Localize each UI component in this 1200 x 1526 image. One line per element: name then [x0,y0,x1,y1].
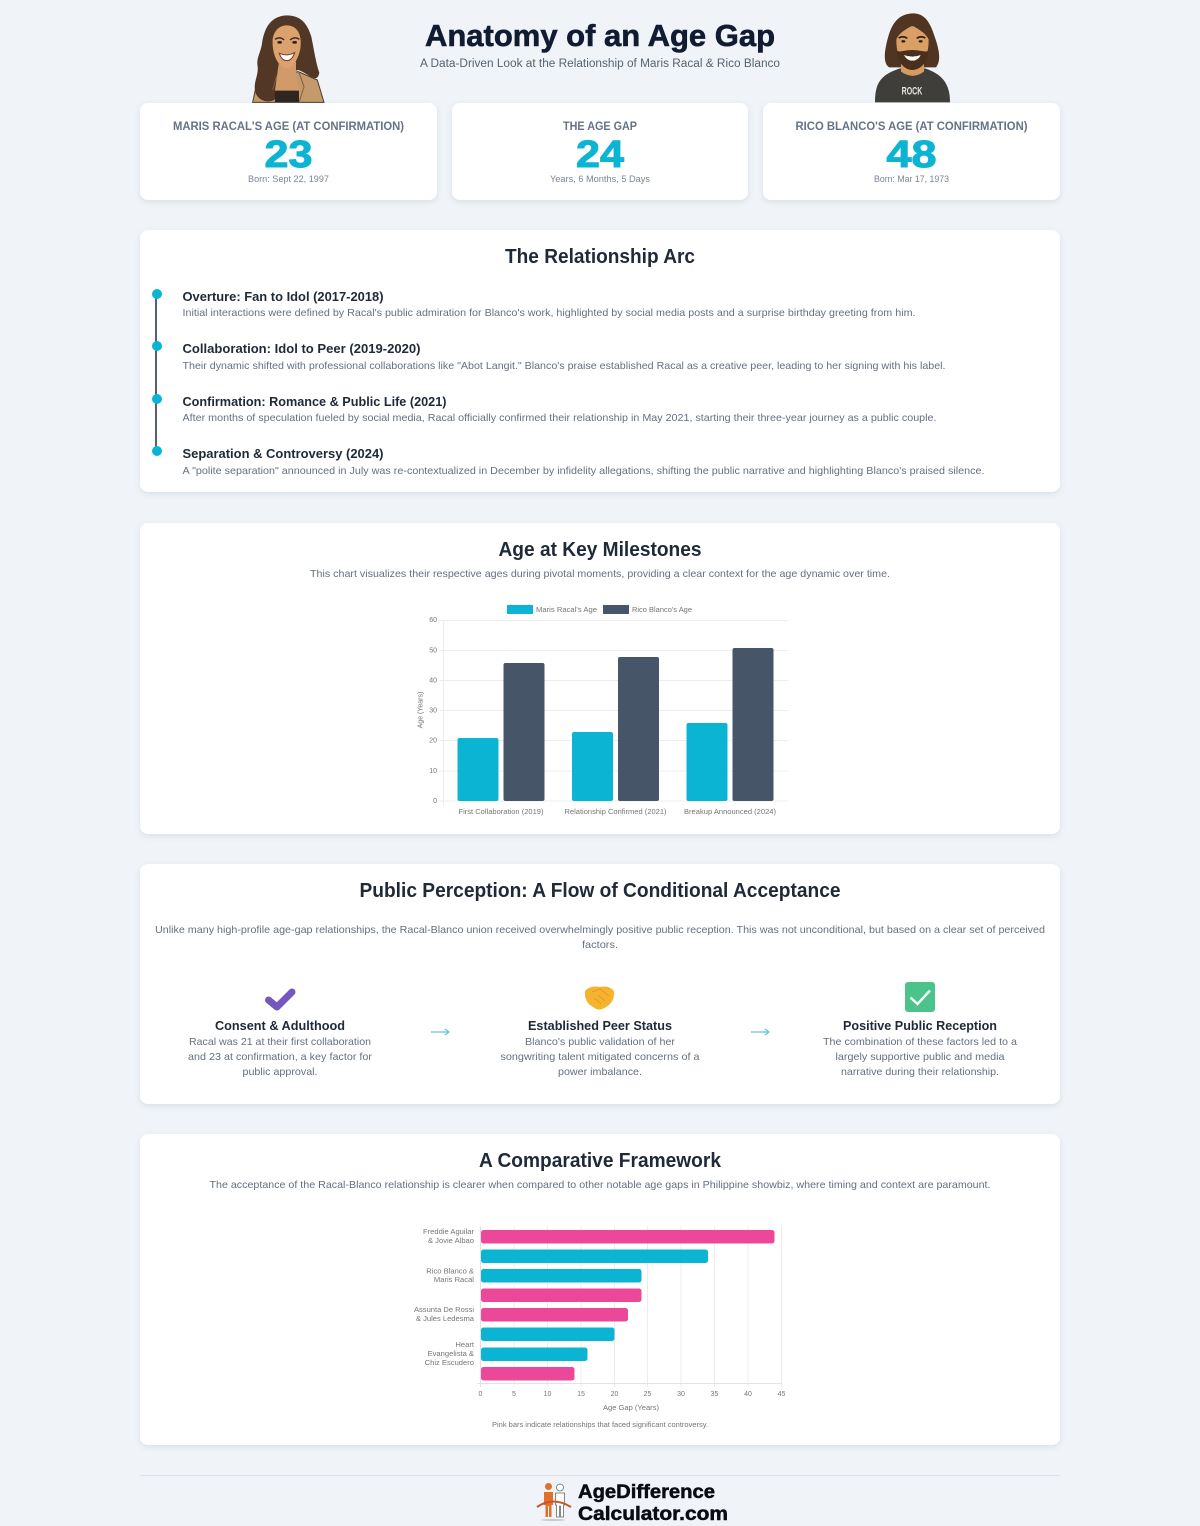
stat card: Maris age: MARIS RACAL'S AGE (AT CONFIRMATION) [173,121,404,133]
heading: relationship arc: The Relationship Arc [505,246,695,268]
bar chart: age gaps: Assunta De Rossi [414,1305,474,1314]
bar chart: age gaps: Freddie Aguilar [423,1227,474,1236]
flow step: established peer status [500,986,700,1078]
flow step: positive public reception: The combination of these factors led to a [823,1036,1017,1048]
flow step: established peer status: Established Peer Status [528,1018,672,1033]
bar chart: age gaps: 10 [544,1391,551,1398]
panel: the relationship arc [140,230,1060,492]
panel: age at key milestones [140,523,1060,834]
timeline item: confirmation [182,394,936,424]
bar chart: age gaps: Evangelista & [428,1349,474,1358]
chart note: Pink bars indicate relationships that faced significant controversy. [492,1422,708,1429]
flow step: established peer status: power imbalance. [558,1066,642,1078]
icon: Maris Racal avatar [253,15,324,102]
bar chart: ages: Breakup Announced (2024) [684,809,776,816]
bar chart: ages: 60 [429,617,437,624]
flow step: established peer status: songwriting talent mitigated concerns of a [500,1051,700,1063]
stat card: Rico age: Born: Mar 17, 1973 [874,174,949,184]
flow step: positive public reception: largely supportive public and media [836,1051,1005,1063]
stat card: Maris age: Born: Sept 22, 1997 [248,174,329,184]
description: comparative framework: The acceptance of the Racal-Blanco relationship is clearer when compared to other notable age gaps in Philippine showbiz, where timing and context are paramount. [210,1179,990,1191]
icon: age difference people [537,1483,571,1521]
bar chart: age gaps: 40 [744,1391,752,1398]
bar chart: ages: First Collaboration (2019) [458,809,544,816]
bar chart: age gaps [414,1226,785,1412]
icon: handshake [585,986,614,1010]
icon: Rico Blanco avatar [875,13,950,102]
flow step: consent and adulthood: Consent & Adulthood [215,1018,345,1033]
timeline item: confirmation: Confirmation: Romance & Public Life (2021) [182,394,446,409]
bar chart: age gaps: 35 [711,1391,718,1398]
icon: green check box [905,982,935,1012]
timeline item: separation: Separation & Controversy (2024) [182,446,384,461]
timeline item: overture: Initial interactions were defined by Racal's public admiration for Blanco's work, highlighted by social media posts and a surprise birthday greeting from him. [182,307,916,319]
icon: Rico Blanco avatar: ROCK [902,86,922,98]
stat card: Maris age: 23 [264,134,312,176]
stat card: the age gap [452,103,748,200]
timeline item: separation: A "polite separation" announced in July was re-contextualized in December by infidelity allegations, shifting the public narrative and highlighting Blanco's praised silence. [182,465,984,477]
stat card: Rico age: 48 [886,134,936,176]
bar chart: age gaps: Heart [455,1340,475,1349]
bar chart: ages [418,605,788,816]
legend: Maris Racal's Age [536,607,597,614]
legend [507,605,692,614]
bar chart: age gaps: Chiz Escudero [425,1358,474,1367]
bar chart: age gaps: Rico Blanco & [426,1266,474,1276]
footer logo: AgeDifference [578,1482,715,1503]
bar chart: ages: 20 [429,738,437,744]
timeline item: collaboration: Their dynamic shifted with professional collaborations like "Abot Langit." Blanco's praise established Racal as a creative peer, leading to her signing with his label. [182,360,946,372]
subtitle: A Data-Driven Look at the Relationship of Maris Racal & Rico Blanco [420,58,780,70]
panel: comparative framework [140,1134,1060,1445]
heading: comparative framework: A Comparative Framework [479,1150,722,1172]
bar chart: ages: 0 [433,798,437,805]
stat card: the age gap: Years, 6 Months, 5 Days [550,174,651,184]
legend: Rico Blanco's Age [632,607,692,614]
bar chart: age gaps: Maris Racal [434,1275,474,1284]
bar chart: age gaps: 45 [778,1391,785,1398]
bar chart: age gaps: 15 [577,1391,585,1398]
heading: milestones: Age at Key Milestones [498,539,702,561]
timeline item: collaboration: Collaboration: Idol to Peer (2019-2020) [182,341,420,356]
bar chart: age gaps: & Jovie Albao [428,1236,474,1245]
stat card: the age gap: 24 [576,134,624,176]
bar chart: age gaps: Age Gap (Years) [603,1405,659,1412]
bar chart: age gaps: 25 [644,1391,651,1398]
timeline item: collaboration [182,341,946,372]
timeline item: confirmation: After months of speculation fueled by social media, Racal officially confirmed their relationship in May 2021, starting their three-year journey as a public couple. [182,412,936,424]
panel: public perception [140,864,1060,1104]
timeline item: overture: Overture: Fan to Idol (2017-2018) [182,289,384,304]
heading: public perception: Public Perception: A Flow of Conditional Acceptance [360,880,840,902]
flow step: positive public reception: narrative during their relationship. [841,1066,999,1078]
flow step: positive public reception: Positive Public Reception [843,1018,997,1033]
bar chart: age gaps: 5 [512,1391,516,1398]
title: Anatomy of an Age Gap [425,18,775,53]
bar chart: ages: 30 [429,708,437,714]
timeline [152,289,162,456]
flow step: consent and adulthood: Racal was 21 at their first collaboration [189,1036,371,1048]
bar chart: age gaps: 20 [611,1391,618,1398]
flow step: consent and adulthood: public approval. [242,1066,318,1078]
bar chart: age gaps: 0 [479,1391,483,1398]
bar chart: ages: 10 [429,768,437,775]
timeline item: separation [182,446,984,477]
arrow [751,1029,769,1035]
footer logo: Calculator.com [578,1504,728,1525]
arrow [431,1029,449,1035]
bar chart: age gaps: & Jules Ledesma [416,1314,475,1323]
stat card: Rico age: RICO BLANCO'S AGE (AT CONFIRMATION) [796,121,1028,133]
timeline item: overture [182,289,916,319]
flow step: consent and adulthood: and 23 at confirmation, a key factor for [188,1051,373,1063]
description: milestones: This chart visualizes their respective ages during pivotal moments, providing a clear context for the age dynamic over time. [310,568,890,580]
bar chart: age gaps: 30 [677,1391,685,1398]
footer logo [537,1482,728,1525]
bar chart: ages: 40 [429,678,437,684]
stat card: Rico age [763,103,1060,200]
stat card: Maris age [140,103,437,200]
icon: purple check [268,992,292,1007]
bar chart: ages: 50 [429,648,437,654]
bar chart: ages: Age (Years) [418,692,424,728]
stat card: the age gap: THE AGE GAP [563,121,637,133]
description: public perception: factors. [582,939,618,951]
bar chart: ages: Relationship Confirmed (2021) [564,809,666,816]
description: public perception: Unlike many high-profile age-gap relationships, the Racal-Blanco union received overwhelmingly positive public reception. This was not unconditional, but based on a clear set of perceived [155,924,1045,936]
description: public perception [155,924,1045,951]
flow step: established peer status: Blanco's public validation of her [525,1036,676,1048]
flow step: positive public reception [823,982,1017,1078]
flow step: consent and adulthood [188,992,373,1078]
